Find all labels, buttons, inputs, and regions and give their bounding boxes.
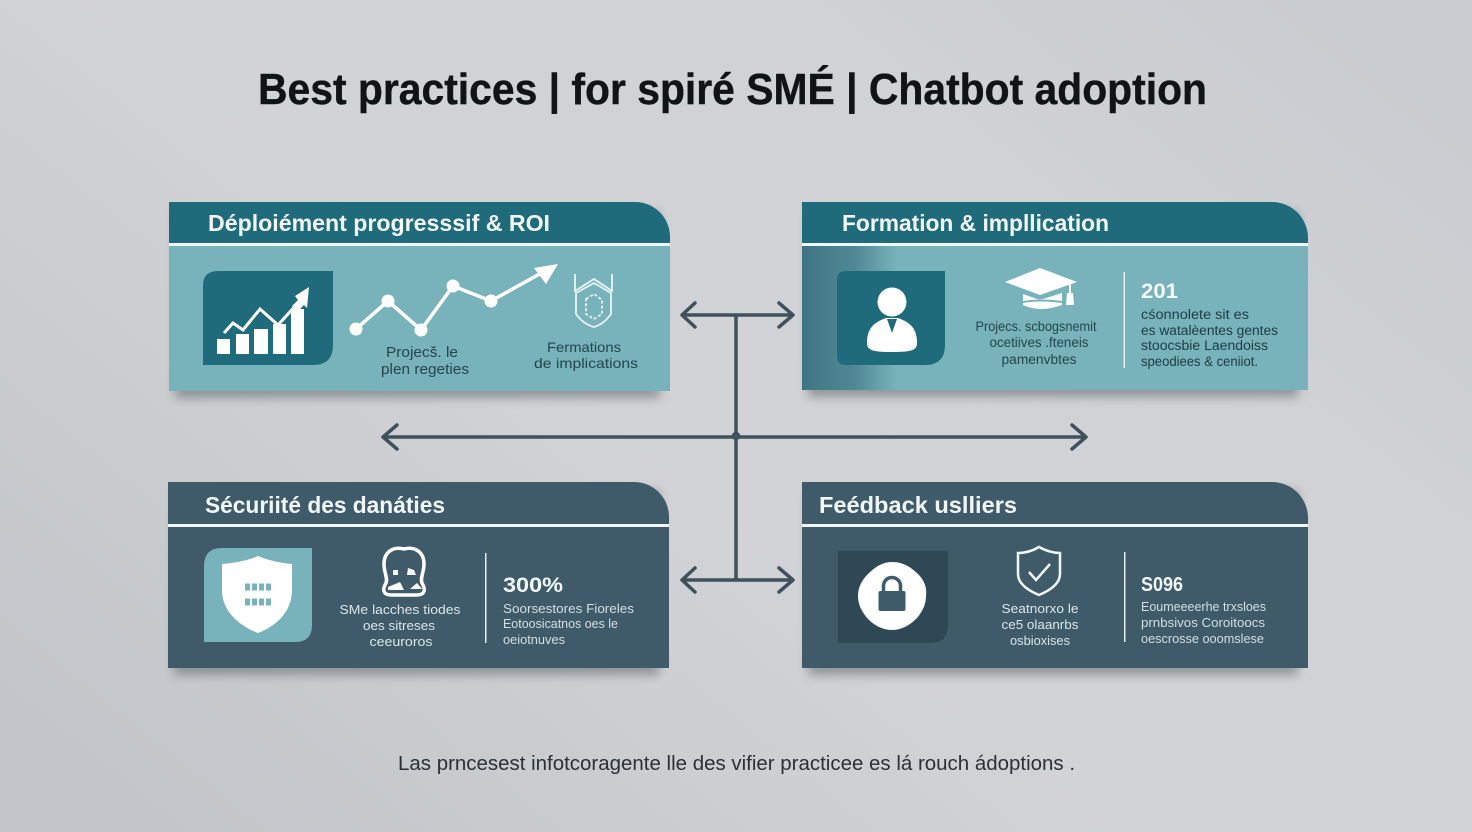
divider [1124,272,1125,368]
text: formation label: de implications [534,355,638,371]
text: project description: pamenvbtes [1002,352,1077,367]
text: project label [381,345,469,378]
divider [485,553,486,643]
text: description [1002,601,1079,648]
text: stat description: Eoumeeeerhe trxsloes [1141,600,1266,614]
text: stat description: stoocsbie Laendoiss [1141,338,1268,353]
text: description: oes sitreses [363,618,436,633]
stat: S096 [1141,574,1183,596]
icon: bar chart [203,271,333,365]
text: stat description: prnbsivos Coroitoocs [1141,616,1265,630]
icon: house crest [575,274,612,327]
icon: graduation cap [1005,268,1077,309]
icon: shield [204,548,312,642]
text: project label: Projecš. le [386,345,458,361]
text: project label: plen regeties [381,362,469,378]
text: stat description: Soorsestores Fioreles [503,602,634,616]
icon: person [837,271,945,365]
text: project description [976,319,1097,367]
text: formation label [534,339,638,371]
text: stat description [503,602,634,647]
text: project description: Projecs. scbogsnemit [976,319,1097,334]
text: project description: ocetiives .fteneis [990,335,1089,350]
text: stat description: es watalèentes gentes [1141,323,1278,338]
text: description [340,602,461,649]
text: description: SMe lacches tiodes [340,602,461,617]
text: stat description [1141,600,1266,646]
heading: Déploiément progresssif & ROI [208,210,550,236]
heading: Feédback uslliers [819,492,1017,518]
stat: 201 [1141,280,1178,303]
text: description: ce5 olaanrbs [1002,617,1079,632]
icon: padlock [838,551,948,643]
text: description: osbioxises [1010,633,1070,648]
title: Best practices | for spiré SMÉ | Chatbot adoption [258,64,1207,115]
panel: Formation & implication [802,202,1308,397]
text: description: Seatnorxo le [1002,601,1078,616]
heading: Formation & impllication [842,210,1109,236]
connector arrows [383,303,1086,592]
panel: Sécurité des données [168,482,669,675]
text: formation label: Fermations [547,339,621,355]
text: stat description: oescrosse ooomslese [1141,632,1264,646]
text: stat description: speodiees & ceniiot. [1141,354,1258,369]
text: stat description: Eotoosicatnos oes le [503,617,618,631]
text: stat description: cśonnolete sit es [1141,307,1249,322]
stat: 300% [503,574,563,597]
divider [1124,552,1126,642]
panel: Feedback utilisateurs [802,482,1308,675]
line chart with arrow [350,264,558,336]
icon: shield check [1018,547,1060,595]
icon: data character [384,548,424,595]
heading: Sécuriité des danáties [205,492,445,518]
footer caption: Las prncesest infotcoragente lle des vifier practicee es lá rouch ádoptions . [398,753,1075,775]
text: stat description [1141,307,1278,369]
text: stat description: oeiotnuves [503,633,565,647]
panel: Déploiement progressif & ROI [169,202,670,398]
text: description: ceeuroros [370,634,433,649]
